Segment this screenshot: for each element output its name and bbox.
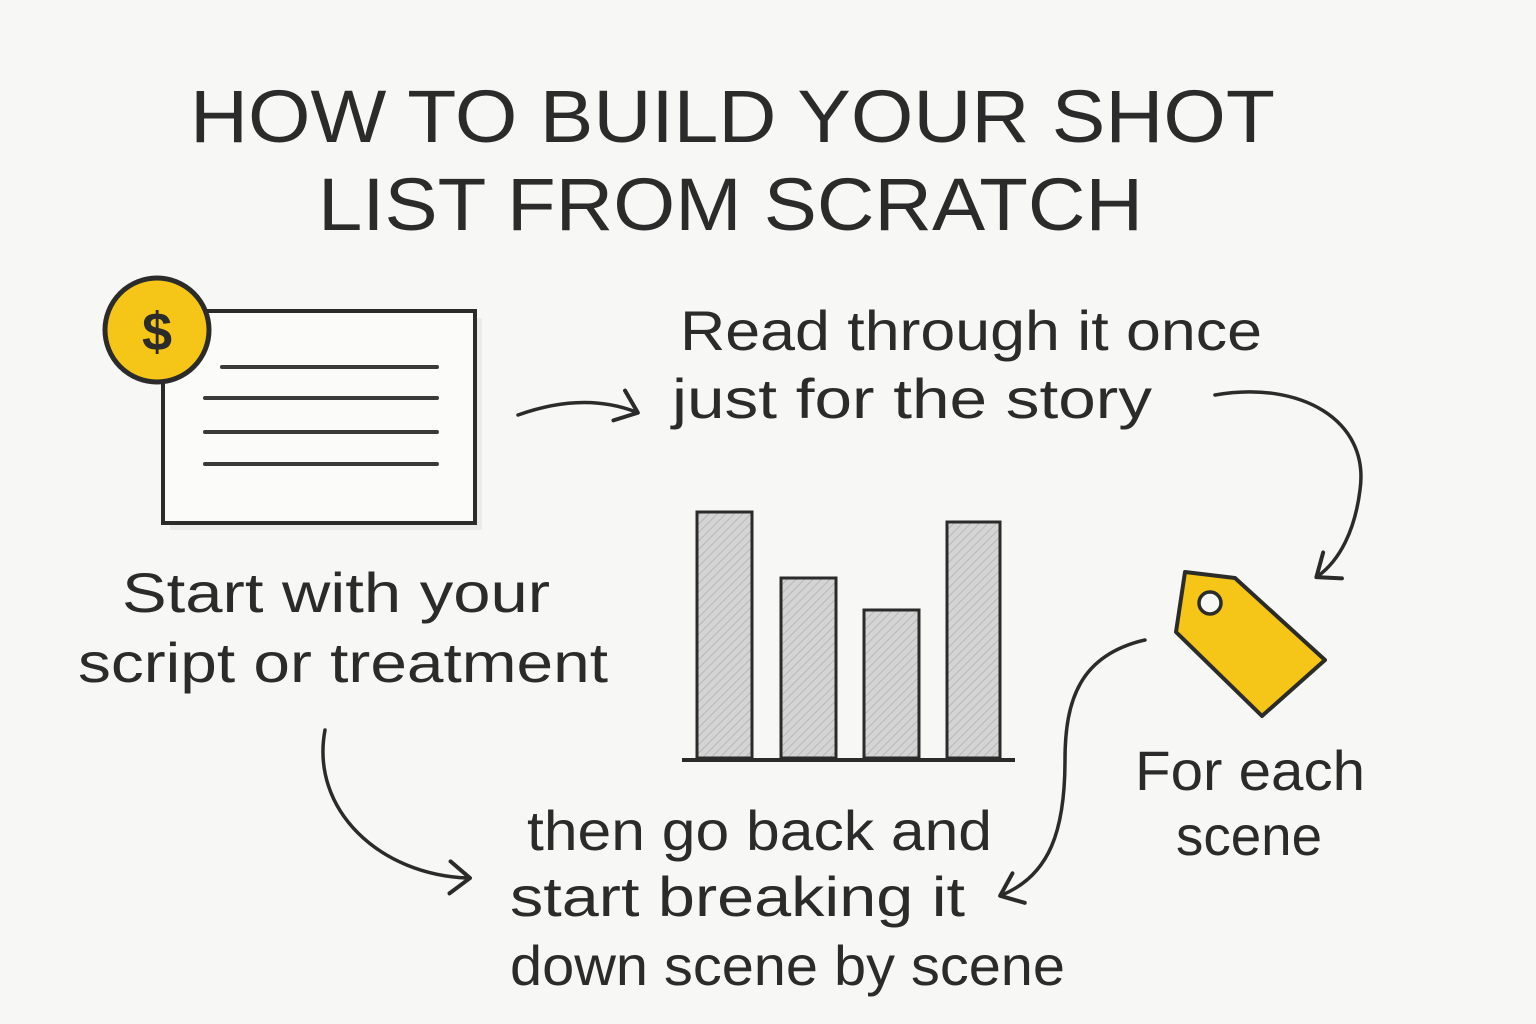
icon: dollar coin: $ — [142, 302, 172, 362]
arrow: scene to breakdown — [1002, 640, 1145, 895]
text: read through: Read through it once — [680, 299, 1262, 362]
bar chart — [682, 512, 1015, 760]
text: start with your script — [78, 561, 609, 694]
icon: dollar coin — [105, 278, 209, 382]
arrow: script to breakdown — [323, 730, 468, 878]
title: LIST FROM SCRATCH — [318, 163, 1143, 246]
text: then go back: then go back and — [527, 799, 992, 862]
text: then go back: down scene by scene — [510, 934, 1065, 997]
title — [190, 75, 1275, 246]
arrow: script to read — [518, 403, 636, 415]
text: read through — [670, 299, 1262, 430]
text: for each scene: For each — [1135, 739, 1365, 802]
text: read through: just for the story — [670, 367, 1152, 430]
title: HOW TO BUILD YOUR SHOT — [190, 75, 1275, 158]
arrow: read to scene — [1215, 392, 1361, 576]
icon: script document — [163, 311, 482, 530]
text: for each scene — [1135, 739, 1365, 867]
icon: yellow tag — [1176, 572, 1325, 716]
text: then go back: start breaking it — [510, 865, 966, 928]
text: then go back — [510, 799, 1065, 997]
text: for each scene: scene — [1176, 804, 1322, 867]
text: start with your script: script or treatment — [78, 631, 609, 694]
text: start with your script: Start with your — [122, 561, 550, 624]
